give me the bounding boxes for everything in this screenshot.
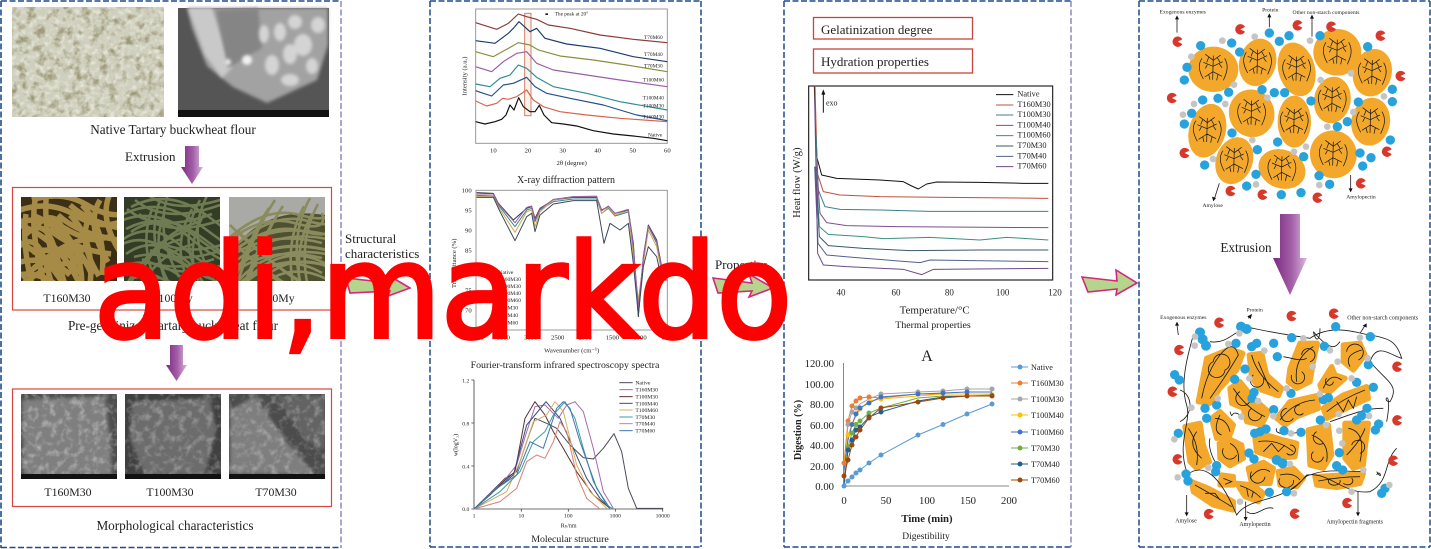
label: T70My: T70My bbox=[259, 291, 295, 305]
panel: raw materials and morphology bbox=[1, 1, 341, 548]
diagram: extruded starch fragments: Amylose bbox=[1175, 518, 1197, 524]
photo: native flour bbox=[12, 7, 164, 117]
chart: digestibility: 20.00 bbox=[810, 461, 834, 473]
photo: SEM T70M30 bbox=[229, 394, 325, 479]
chart: digestibility: Digestion (%) bbox=[793, 400, 804, 460]
photo: SEM T100M30 bbox=[125, 394, 221, 479]
label: panel letter A: A bbox=[921, 348, 933, 365]
caption: FTIR: Fourier-transform infrared spectroscopy spectra bbox=[471, 360, 660, 371]
label: properties: Properties bbox=[715, 257, 768, 272]
chart: digestibility: 100.00 bbox=[805, 379, 834, 391]
chart: FTIR: 95 bbox=[465, 208, 472, 215]
chart: XRD: 10 bbox=[490, 147, 497, 154]
diagram: native starch granules: Amylose bbox=[1202, 203, 1223, 209]
arrow: extrusion big bbox=[1273, 214, 1307, 295]
chart: DSC thermal properties: Heat flow (W/g) bbox=[792, 147, 803, 218]
chart: XRD bbox=[462, 9, 671, 167]
label: extrusion: Extrusion bbox=[125, 149, 176, 164]
label: T160M30 SEM: T160M30 bbox=[44, 485, 92, 499]
chart: XRD: 50 bbox=[629, 147, 637, 154]
diagram: extruded starch fragments: Exogenous enzymes bbox=[1160, 315, 1207, 321]
chart: FTIR: 500 bbox=[662, 335, 672, 342]
diagram: native starch granules: Other non-starch components bbox=[1293, 10, 1359, 16]
chart: FTIR: T70M30 bbox=[498, 306, 518, 312]
chart: FTIR: 2000 bbox=[578, 335, 592, 342]
caption: molecular structure: Molecular structure bbox=[531, 534, 609, 545]
photo: T70My noodles bbox=[229, 197, 325, 281]
chart: digestibility: T70M30 bbox=[1031, 444, 1060, 453]
chart: DSC thermal properties: T70M40 bbox=[1017, 151, 1046, 160]
chart: FTIR: Wavenumber (cm⁻¹) bbox=[544, 347, 599, 354]
chart: XRD: 2θ (degree) bbox=[556, 160, 587, 167]
chart: FTIR bbox=[451, 188, 672, 354]
chart: XRD: Native bbox=[648, 132, 663, 138]
chart: FTIR: Native bbox=[498, 270, 514, 276]
chart: digestibility: 0 bbox=[841, 495, 847, 507]
label: T160M30: T160M30 bbox=[43, 291, 91, 305]
chart: digestibility: 100 bbox=[919, 495, 935, 507]
chart: FTIR: T70M40 bbox=[498, 313, 518, 319]
chart: FTIR: 90 bbox=[465, 228, 472, 235]
chart: XRD: T100M40 bbox=[643, 95, 664, 101]
chart: FTIR: 100 bbox=[462, 188, 472, 195]
chart: molecular structure: 10 bbox=[519, 514, 524, 520]
diagram: extruded starch fragments: Amylopectin fragments bbox=[1326, 519, 1384, 526]
chart: digestibility: T100M60 bbox=[1031, 428, 1064, 437]
chart: molecular structure: T100M60 bbox=[635, 408, 658, 414]
chart: DSC thermal properties: T100M40 bbox=[1017, 120, 1051, 129]
chart: FTIR: T100M40 bbox=[498, 291, 521, 297]
label: T100M30 SEM: T100M30 bbox=[146, 485, 194, 499]
chart: digestibility: Time (min) bbox=[901, 513, 953, 525]
diagram: extruded starch fragments bbox=[1160, 308, 1419, 528]
chart: digestibility: T100M30 bbox=[1031, 395, 1064, 404]
chart: molecular structure: Rₕ/nm bbox=[561, 524, 577, 530]
chart: FTIR: 70 bbox=[465, 307, 472, 314]
chart: DSC thermal properties: T100M30 bbox=[1017, 110, 1051, 119]
caption: pre-gelatinized flour: Pre-gelatinized Tartary buckwheat flour bbox=[68, 318, 279, 333]
chart: DSC thermal properties: Temperature/°C bbox=[900, 304, 970, 316]
label: structural characteristics: Structural bbox=[345, 231, 396, 246]
chart: XRD: 60 bbox=[664, 147, 671, 154]
chart: molecular structure: 1000 bbox=[610, 514, 621, 520]
diagram: native starch granules: Protein bbox=[1262, 8, 1279, 14]
caption: thermal properties: Thermal properties bbox=[895, 320, 971, 331]
chart: DSC thermal properties: T70M30 bbox=[1017, 141, 1046, 150]
chart: DSC thermal properties: T160M30 bbox=[1017, 100, 1051, 109]
box: pre-gelatinized flour bbox=[11, 188, 337, 310]
watermark: adi,markdo bbox=[94, 216, 792, 368]
chart: digestibility: Native bbox=[1031, 363, 1053, 372]
label: structural characteristics: characteristics bbox=[345, 246, 419, 261]
chart: DSC thermal properties: 120 bbox=[1048, 287, 1062, 297]
chart: digestibility: T70M40 bbox=[1031, 460, 1060, 469]
chart: molecular structure: 10000 bbox=[656, 514, 670, 520]
diagram: extruded starch fragments: Amylopectin bbox=[1239, 522, 1271, 528]
arrow: structure to properties panel bbox=[713, 274, 773, 297]
chart: digestibility: 150 bbox=[960, 495, 976, 507]
chart: digestibility: 200 bbox=[1001, 495, 1017, 507]
chart: DSC thermal properties: T100M60 bbox=[1017, 131, 1051, 140]
arrow: structural to structure panel bbox=[346, 275, 410, 296]
chart: XRD: T160M30 bbox=[643, 114, 664, 120]
chart: XRD: T100M60 bbox=[643, 78, 664, 84]
chart: XRD: T70M60 bbox=[644, 35, 663, 41]
panel: properties charts bbox=[784, 1, 1071, 547]
chart: molecular structure: T160M30 bbox=[635, 388, 658, 394]
chart: molecular structure: 1 bbox=[473, 514, 476, 520]
chart: digestibility: 60.00 bbox=[810, 420, 834, 432]
chart: molecular structure: T70M60 bbox=[635, 429, 655, 435]
chart: molecular structure: T100M40 bbox=[635, 401, 658, 407]
box: morphological SEM images bbox=[12, 389, 332, 506]
arrow: down to morphology bbox=[166, 345, 187, 381]
chart: FTIR: 3000 bbox=[524, 335, 538, 342]
chart: digestibility: T160M30 bbox=[1031, 379, 1064, 388]
caption: morphological characteristics: Morphological characteristics bbox=[96, 518, 254, 533]
caption: native flour: Native Tartary buckwheat flour bbox=[90, 122, 256, 137]
photo: T100My noodles bbox=[124, 197, 220, 281]
chart: digestibility: 80.00 bbox=[810, 399, 834, 411]
chart: digestibility: T70M60 bbox=[1031, 476, 1060, 485]
photo: SEM T160M30 bbox=[21, 394, 117, 479]
chart: XRD: Intensity (a.u.) bbox=[462, 56, 469, 96]
box: gelatinization degree bbox=[814, 18, 972, 39]
chart: molecular structure: 0.4 bbox=[462, 464, 469, 470]
box: hydration properties: Hydration properties bbox=[821, 54, 929, 69]
arrow: extrusion bbox=[181, 146, 203, 184]
chart: DSC thermal properties: exo bbox=[826, 98, 838, 107]
chart: FTIR: 85 bbox=[465, 248, 472, 255]
diagram: native starch granules bbox=[1159, 8, 1405, 209]
chart: XRD: 30 bbox=[559, 147, 567, 154]
chart: FTIR: Transmittance (%) bbox=[451, 239, 458, 288]
chart: digestibility: T100M40 bbox=[1031, 411, 1064, 420]
chart: digestibility bbox=[793, 348, 1064, 525]
chart: molecular structure: T70M40 bbox=[635, 422, 655, 428]
chart: XRD: 20 bbox=[525, 147, 532, 154]
chart: FTIR: T100M30 bbox=[498, 284, 521, 290]
chart: FTIR: T100M60 bbox=[498, 298, 521, 304]
chart: molecular structure: 0.0 bbox=[462, 507, 469, 513]
chart: molecular structure: 0.8 bbox=[462, 421, 469, 427]
diagram: native starch granules: Amylopectin bbox=[1346, 194, 1376, 200]
chart: FTIR: 3500 bbox=[497, 335, 511, 342]
panel: structure charts bbox=[430, 1, 701, 547]
chart: XRD: 40 bbox=[594, 147, 602, 154]
chart: DSC thermal properties: 40 bbox=[837, 287, 846, 297]
chart: molecular structure: 100 bbox=[564, 514, 573, 520]
chart: molecular structure: T100M30 bbox=[635, 395, 658, 401]
chart: DSC thermal properties: 80 bbox=[945, 287, 954, 297]
label: T70M30 SEM: T70M30 bbox=[255, 485, 297, 499]
diagram: extruded starch fragments: Protein bbox=[1246, 308, 1263, 314]
chart: FTIR: 75 bbox=[465, 288, 472, 295]
chart: molecular structure: 1.2 bbox=[462, 378, 469, 384]
chart: digestibility: 50 bbox=[881, 495, 891, 507]
box: gelatinization degree: Gelatinization degree bbox=[821, 22, 933, 37]
chart: DSC thermal properties: T70M60 bbox=[1017, 162, 1046, 171]
label: extrusion step: Extrusion bbox=[1220, 240, 1272, 255]
photo: T160M30 noodles bbox=[21, 197, 117, 281]
chart: molecular structure bbox=[452, 378, 670, 530]
chart: DSC thermal properties bbox=[792, 86, 1062, 316]
caption: XRD: X-ray diffraction pattern bbox=[517, 175, 615, 186]
chart: digestibility: 0.00 bbox=[815, 481, 834, 493]
chart: FTIR: 1500 bbox=[606, 335, 620, 342]
chart: XRD: T70M30 bbox=[644, 64, 663, 70]
chart: molecular structure: w(logV₂) bbox=[452, 434, 459, 456]
diagram: extruded starch fragments: Other non-starch components bbox=[1347, 316, 1419, 322]
arrow: properties to mechanism panel bbox=[1082, 270, 1137, 295]
chart: FTIR: 4000 bbox=[470, 335, 484, 342]
caption: digestibility: Digestibility bbox=[902, 532, 950, 542]
chart: DSC thermal properties: 100 bbox=[996, 287, 1010, 297]
chart: digestibility: 40.00 bbox=[810, 440, 834, 452]
chart: DSC thermal properties: Native bbox=[1017, 90, 1040, 99]
chart: FTIR: 1000 bbox=[633, 335, 647, 342]
label: T100My: T100My bbox=[151, 291, 193, 305]
chart: molecular structure: Native bbox=[635, 381, 651, 387]
chart: FTIR: 2500 bbox=[551, 335, 565, 342]
box: hydration properties bbox=[814, 49, 972, 73]
chart: digestibility: 120.00 bbox=[805, 358, 834, 370]
chart: XRD: The peak at 20° bbox=[555, 11, 588, 18]
chart: XRD: T70M40 bbox=[644, 52, 663, 58]
chart: molecular structure: T70M30 bbox=[635, 415, 655, 421]
chart: XRD: T100M30 bbox=[643, 104, 664, 110]
diagram: native starch granules: Exogenous enzymes bbox=[1159, 9, 1206, 15]
photo: SEM of native flour bbox=[178, 8, 329, 117]
chart: FTIR: T70M60 bbox=[498, 320, 518, 326]
panel: mechanism bbox=[1139, 1, 1430, 547]
chart: FTIR: T160M30 bbox=[498, 277, 521, 283]
chart: DSC thermal properties: 60 bbox=[892, 287, 901, 297]
